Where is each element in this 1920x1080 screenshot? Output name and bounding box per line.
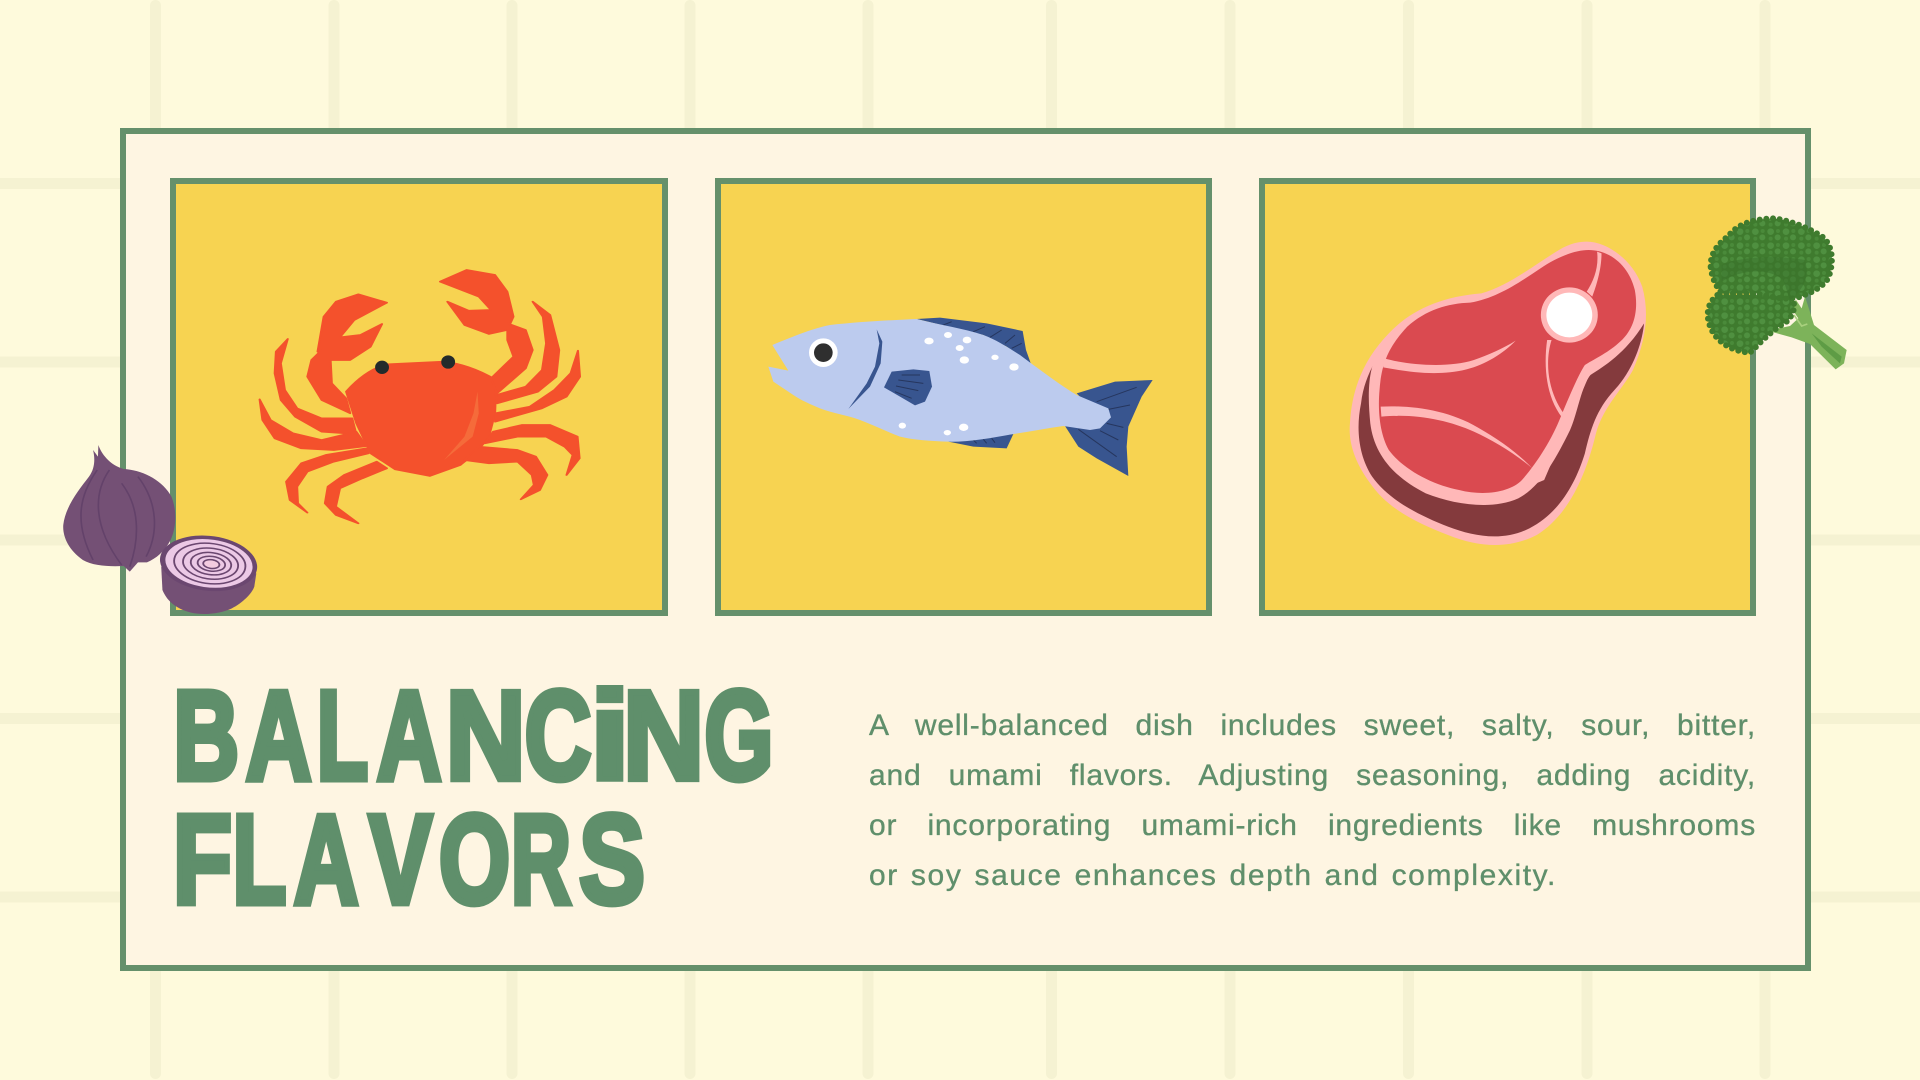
text block: description: or incorporating umami-rich ingredients like mushrooms: [869, 809, 1756, 842]
title: Balancing Flavors: A: [377, 666, 441, 807]
panel: steak tile: [1262, 181, 1753, 613]
icon: crab: [260, 270, 580, 523]
title: Balancing Flavors: A: [294, 790, 358, 931]
title: Balancing Flavors: [173, 665, 773, 931]
title: Balancing Flavors: i: [589, 666, 631, 806]
title: Balancing Flavors: N: [623, 666, 704, 806]
icon: broccoli: [1708, 218, 1847, 369]
title: Balancing Flavors: G: [705, 667, 773, 807]
panel: crab tile: [173, 181, 665, 613]
title: Balancing Flavors: L: [317, 665, 368, 806]
title: Balancing Flavors: R: [511, 788, 571, 930]
title: Balancing Flavors: O: [439, 790, 510, 930]
panel: fish tile: [718, 181, 1209, 613]
title: Balancing Flavors: S: [579, 789, 645, 930]
title: Balancing Flavors: B: [173, 667, 239, 807]
text block: description: or soy sauce enhances depth and complexity.: [869, 859, 1557, 892]
title: Balancing Flavors: N: [446, 666, 526, 807]
panel: main frame: [123, 131, 1808, 968]
icon: steak: [1350, 242, 1646, 545]
text block: description: and umami flavors. Adjusting seasoning, adding acidity,: [869, 759, 1756, 792]
title: Balancing Flavors: L: [233, 790, 286, 931]
title: Balancing Flavors: C: [525, 666, 591, 806]
title: Balancing Flavors: V: [369, 789, 432, 930]
text block: description: [868, 709, 1756, 892]
text block: description: A well-balanced dish includes sweet, salty, sour, bitter,: [869, 709, 1756, 742]
icon: red onions: [63, 445, 263, 614]
icon: fish: [768, 318, 1153, 476]
title: Balancing Flavors: A: [246, 666, 311, 807]
title: Balancing Flavors: F: [173, 788, 232, 930]
